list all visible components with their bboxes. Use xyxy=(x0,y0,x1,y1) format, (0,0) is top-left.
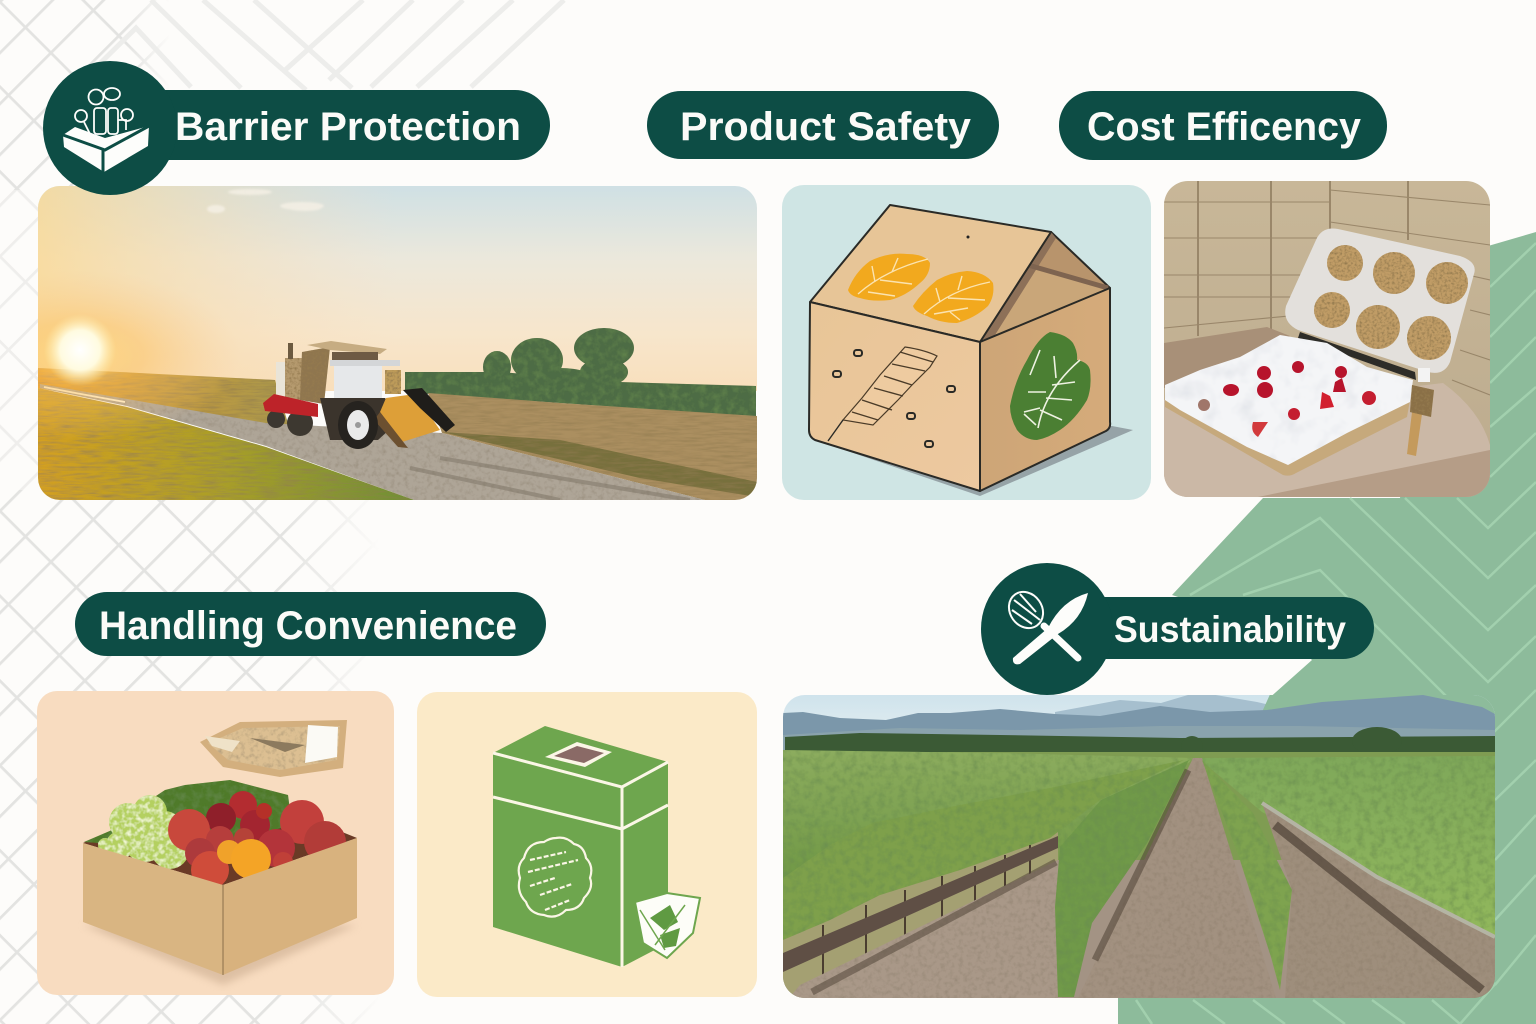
green chevron background shape xyxy=(1118,232,1536,1024)
label: Sustainability xyxy=(1114,609,1346,650)
dark green leaves xyxy=(84,780,292,850)
icon: open box with people xyxy=(63,88,149,172)
sky xyxy=(38,186,757,391)
box shadow xyxy=(83,925,357,985)
box faces xyxy=(809,205,1110,491)
sun xyxy=(46,317,113,384)
white foam filling xyxy=(1165,335,1413,465)
carton window xyxy=(545,742,612,767)
setting sun glow xyxy=(38,290,210,432)
label: Barrier Protection xyxy=(175,105,521,149)
panel: handling convenience produce box xyxy=(37,691,394,995)
kraft produce box xyxy=(83,838,357,975)
central hedge xyxy=(1055,760,1189,997)
right field xyxy=(1198,756,1495,937)
sky xyxy=(783,695,1495,720)
left field xyxy=(783,750,1195,960)
clouds xyxy=(207,189,324,213)
tree line xyxy=(785,727,1495,752)
label: Product Safety xyxy=(680,105,972,149)
background lattice pattern xyxy=(0,0,566,1024)
path dark edges xyxy=(1095,770,1188,960)
road xyxy=(40,384,705,500)
heading pill: product safety xyxy=(647,91,999,159)
panel: green carton illustration xyxy=(417,692,757,997)
holes and strap sketch xyxy=(828,236,970,447)
label: Cost Efficency xyxy=(1087,105,1362,149)
produce base xyxy=(83,815,357,885)
warm sky tint xyxy=(38,186,322,391)
left hedgerow canopy xyxy=(783,760,1184,940)
wall joints xyxy=(1164,181,1490,395)
wooden stake label xyxy=(1407,368,1434,456)
open white lid xyxy=(1285,228,1475,373)
red tomatoes and orange xyxy=(168,791,346,889)
tiled wall xyxy=(1164,181,1490,497)
heading pill: barrier protection xyxy=(43,61,550,195)
orange leaf prints xyxy=(848,254,993,323)
panel: barrier protection farm road photo xyxy=(0,186,757,500)
stone edge xyxy=(1262,803,1495,937)
dirt base xyxy=(783,860,1495,998)
round seal xyxy=(519,838,591,917)
left path dark edge xyxy=(812,862,1056,992)
red berries xyxy=(1198,361,1376,437)
harvest truck xyxy=(263,341,455,449)
central dirt path xyxy=(1078,758,1276,998)
kraft tray xyxy=(200,720,347,777)
panel: sustainability field photo xyxy=(783,690,1500,998)
biscuit cookies xyxy=(1314,245,1468,360)
green leaf print xyxy=(1010,332,1091,440)
left dirt path xyxy=(789,860,1062,998)
right dirt path xyxy=(1262,803,1495,998)
leaf shield xyxy=(635,893,700,958)
right hedge xyxy=(1202,760,1292,990)
heading pill: cost efficiency xyxy=(1059,91,1387,160)
panel: product safety cardboard box illustration xyxy=(782,185,1151,500)
green background showing through the sky xyxy=(1263,695,1495,715)
table front xyxy=(1253,450,1490,498)
field verge xyxy=(442,432,757,497)
lime greens xyxy=(98,795,189,869)
hedgerow trunks xyxy=(823,845,1030,975)
heading pill: handling convenience xyxy=(75,592,546,656)
tray rim xyxy=(1165,400,1410,476)
far golden field xyxy=(38,368,290,430)
tan ground under trees xyxy=(783,830,1058,998)
label: Handling Convenience xyxy=(99,604,517,648)
floor xyxy=(1164,327,1290,388)
fence strip xyxy=(783,836,1058,972)
icon: leaf and crossed utensils xyxy=(1002,585,1088,664)
far mountain peaks xyxy=(1055,695,1266,716)
dark furrow xyxy=(1275,825,1482,990)
carton body xyxy=(493,726,668,967)
roadside grass xyxy=(38,388,414,500)
right crop field xyxy=(428,393,757,500)
tree line xyxy=(405,328,756,417)
near mountain range xyxy=(783,695,1495,735)
panel: cost efficiency tray photo xyxy=(1164,181,1490,498)
heading pill: sustainability xyxy=(981,563,1374,695)
ground base xyxy=(783,752,1495,998)
box shadow xyxy=(815,426,1133,496)
table top xyxy=(1164,383,1490,497)
